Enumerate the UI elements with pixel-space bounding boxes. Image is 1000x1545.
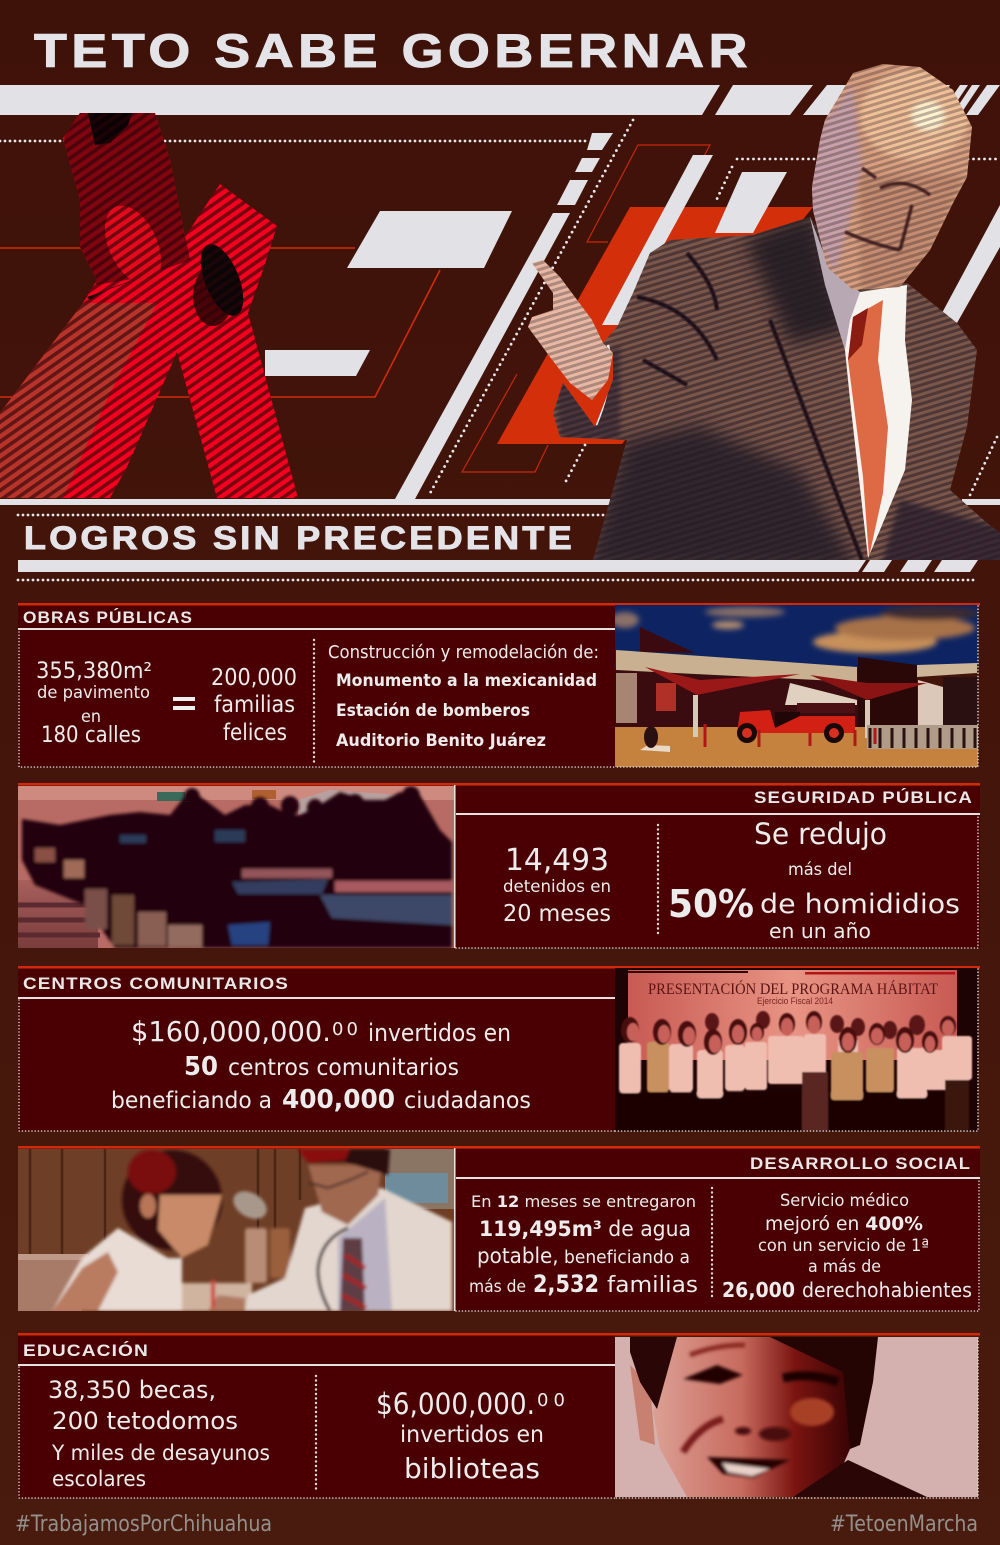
stat: homicidios: [668, 817, 960, 943]
stat: familias felices: familias: [214, 692, 295, 718]
header graphic: stripes and diagonal shapes: [0, 85, 1000, 505]
stat: becas: Y miles de desayunos: [51, 1441, 270, 1465]
stat: inversión en centros: centros comunitarios: [228, 1055, 459, 1081]
list: construcción y remodelación: Construcción y remodelación de:: [328, 642, 599, 663]
stat: servicio médico: [722, 1191, 972, 1302]
title: TETO SABE GOBERNAR: [34, 24, 752, 77]
stat: servicio médico: Servicio médico: [780, 1191, 909, 1211]
stat: homicidios: 50%: [668, 882, 754, 926]
stat: servicio médico: con un servicio de 1ª: [758, 1236, 929, 1256]
stat: servicio médico: 26,000: [722, 1278, 795, 1302]
stat: homicidios: en un año: [769, 919, 871, 943]
stat: bibliotecas: 00: [537, 1390, 565, 1411]
photo 4 divider edge: [454, 1148, 456, 1311]
photo: doctor with child: [18, 1149, 454, 1311]
head: [805, 60, 975, 295]
pointing hand: [528, 260, 613, 400]
stat: agua potable: más de: [469, 1277, 526, 1297]
photo: police convoy: [18, 786, 454, 948]
panel: seguridad pública: [18, 783, 980, 948]
photo: smiling boy: [615, 1337, 978, 1497]
stat: becas: 38,350 becas,: [48, 1376, 216, 1404]
stat: inversión en centros: [111, 1015, 531, 1115]
heading: obras públicas: OBRAS PÚBLICAS: [23, 608, 193, 627]
heading: seguridad pública: SEGURIDAD PÚBLICA: [754, 788, 973, 807]
list: construcción y remodelación: [328, 642, 599, 751]
stat: inversión en centros: 50: [184, 1052, 218, 1082]
stat: pavimento: en: [81, 707, 101, 727]
stat: familias felices: felices: [223, 720, 287, 746]
stat: bibliotecas: $6,000,000.: [376, 1387, 535, 1421]
hashtag left: #TrabajamosPorChihuahua: [15, 1512, 272, 1537]
stat: inversión en centros: 400,000: [282, 1085, 395, 1115]
stat: detenidos: detenidos en: [503, 877, 611, 897]
list: construcción y remodelación: Estación de bomberos: [336, 701, 530, 721]
stat: pavimento: de pavimento: [37, 683, 150, 703]
stat: bibliotecas: [376, 1387, 565, 1485]
panel: desarrollo social: [18, 1146, 980, 1311]
hashtag right: #TetoenMarcha: [830, 1512, 978, 1537]
collar shadow: [810, 217, 860, 350]
portrait: man in suit pointing: [520, 60, 1000, 570]
photo 1 dotted edge: [615, 606, 978, 767]
stat: agua potable: 2,532: [533, 1270, 599, 1298]
stat: detenidos: 20 meses: [503, 901, 611, 927]
stat: bibliotecas: biblioteas: [404, 1452, 540, 1485]
stat: homicidios: de homididios: [760, 889, 960, 920]
list: construcción y remodelación: Auditorio Benito Juárez: [336, 731, 546, 751]
panel: centros comunitarios: [18, 966, 980, 1131]
stat: homicidios: más del: [788, 860, 852, 880]
photo 5 dotted edge: [615, 1338, 978, 1498]
stat: servicio médico: a más de: [808, 1257, 881, 1277]
stat: inversión en centros: $160,000,000.: [131, 1015, 331, 1048]
photo: programa hábitat group: [615, 968, 978, 1131]
stat: pavimento: [36, 659, 152, 748]
stat: detenidos: [503, 843, 611, 927]
photo: fire station: [611, 605, 980, 767]
photo: programa hábitat group: PRESENTACIÓN DEL PROGRAMA HÁBITAT: [648, 979, 938, 998]
stat: becas: [48, 1376, 270, 1491]
stat: inversión en centros: ciudadanos: [404, 1088, 531, 1114]
heading: educación: EDUCACIÓN: [23, 1341, 149, 1360]
stat: agua potable: familias: [607, 1273, 698, 1298]
stat: agua potable: potable, beneficiando a: [477, 1244, 690, 1268]
red X monument: [0, 113, 300, 498]
stat: inversión en centros: invertidos en: [368, 1019, 511, 1047]
tie shadow: [848, 308, 868, 360]
stat: inversión en centros: 00: [332, 1019, 358, 1040]
photo: programa hábitat group: Ejercicio Fiscal 2014: [757, 996, 833, 1006]
subtitle bottom bar: [18, 515, 978, 580]
stat: servicio médico: derechohabientes: [802, 1278, 972, 1302]
stat: agua potable: [469, 1192, 698, 1298]
stat: familias felices: 200,000: [211, 665, 297, 691]
panel: obras públicas: [18, 603, 980, 767]
shirt: [810, 217, 912, 558]
stat: agua potable: 119,495m³ de agua: [479, 1217, 691, 1241]
list: construcción y remodelación: Monumento a la mexicanidad: [336, 671, 597, 691]
heading: desarrollo social: DESARROLLO SOCIAL: [750, 1154, 971, 1173]
stat: familias felices: [211, 665, 297, 746]
tie: [848, 300, 888, 557]
stat: detenidos: 14,493: [505, 843, 609, 878]
stat: becas: escolares: [52, 1467, 146, 1491]
stat: becas: 200 tetodomos: [52, 1407, 238, 1435]
photo 2 divider edge: [454, 785, 456, 948]
stat: agua potable: En 12 meses se entregaron: [471, 1192, 696, 1211]
heading: centros comunitarios: CENTROS COMUNITARIOS: [23, 974, 289, 993]
photo 3 dotted edge: [615, 969, 978, 1131]
stat: servicio médico: mejoró en 400%: [765, 1213, 923, 1235]
subtitle: LOGROS SIN PRECEDENTE: [24, 520, 575, 556]
stat: pavimento: 355,380m²: [36, 659, 152, 684]
stat: bibliotecas: invertidos en: [400, 1422, 544, 1448]
stripe overlay on face and hand: [528, 64, 972, 400]
stat: inversión en centros: beneficiando a: [111, 1088, 272, 1114]
panel: educación: [18, 1333, 980, 1498]
stat: homicidios: Se redujo: [754, 817, 887, 851]
stat: pavimento: 180 calles: [41, 723, 141, 748]
icon: equals sign: [173, 697, 195, 710]
